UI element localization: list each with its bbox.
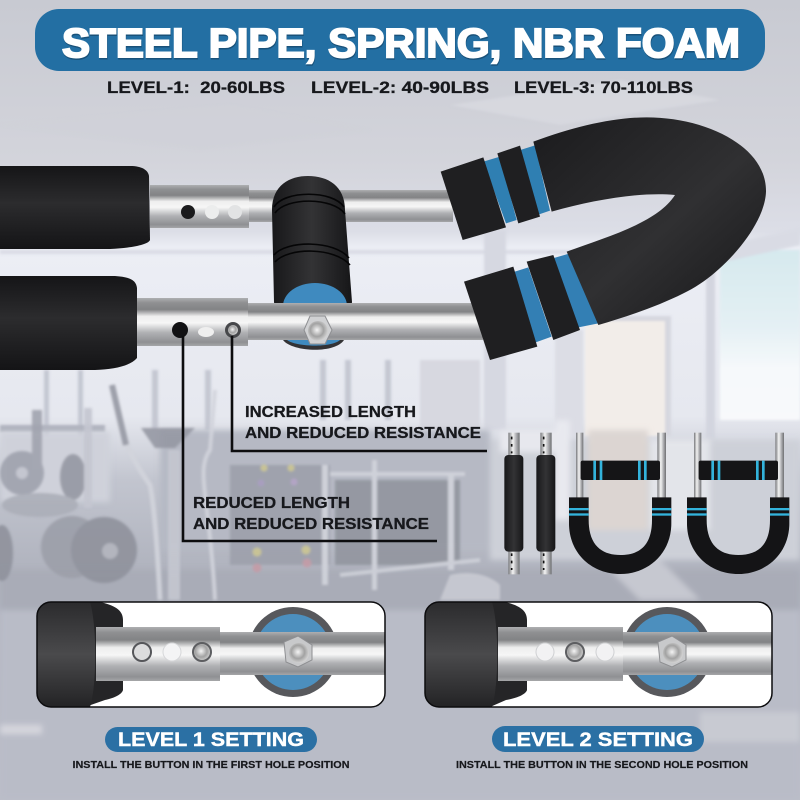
icon: assembled U handle right bbox=[687, 433, 789, 574]
resistance levels row bbox=[107, 78, 693, 97]
panel: level 1 close-up bbox=[37, 602, 385, 707]
background: weights and rack bbox=[0, 385, 500, 600]
icon: assembled U handle left bbox=[569, 433, 671, 574]
level 1 range: LEVEL-1: 20-60LBS bbox=[107, 78, 285, 97]
lower sleeve pipe bbox=[137, 298, 248, 346]
level 2 caption: INSTALL THE BUTTON IN THE SECOND HOLE POSITION bbox=[456, 759, 748, 771]
title banner: STEEL PIPE, SPRING, NBR FOAM bbox=[62, 20, 740, 66]
level 1 caption: INSTALL THE BUTTON IN THE FIRST HOLE POSITION bbox=[72, 759, 350, 771]
level 2 pill bbox=[492, 726, 704, 752]
product kit parts bbox=[504, 433, 789, 574]
lower inner pipe bbox=[248, 303, 483, 340]
cross roller bbox=[272, 176, 352, 350]
icon: two extension tubes bbox=[504, 433, 555, 574]
level 3 range: LEVEL-3: 70-110LBS bbox=[514, 78, 693, 97]
level 2 pill: LEVEL 2 SETTING bbox=[503, 730, 693, 751]
callout: reduced length: AND REDUCED RESISTANCE bbox=[193, 516, 429, 533]
level 2 range: LEVEL-2: 40-90LBS bbox=[311, 78, 489, 97]
panel: level 2 close-up bbox=[425, 602, 772, 707]
upper sleeve pipe bbox=[150, 185, 249, 228]
callout: reduced length: REDUCED LENGTH bbox=[193, 495, 350, 512]
callout: increased length: INCREASED LENGTH bbox=[245, 404, 416, 421]
level 1 pill: LEVEL 1 SETTING bbox=[118, 730, 304, 751]
upper pipe holes bbox=[181, 205, 242, 219]
upper foam grip bbox=[0, 166, 150, 249]
title banner bbox=[35, 9, 765, 71]
callout: increased length bbox=[232, 336, 487, 451]
callout: increased length: AND REDUCED RESISTANCE bbox=[245, 425, 481, 442]
main product: handle close-up bbox=[0, 117, 766, 370]
U-shaped foam handle bbox=[441, 117, 766, 360]
callout: reduced length bbox=[183, 336, 437, 541]
upper inner pipe bbox=[248, 190, 453, 222]
title banner: STEEL PIPE, SPRING, NBR FOAM bbox=[62, 22, 741, 68]
lower foam grip bbox=[0, 276, 137, 370]
hex bolt bbox=[304, 316, 332, 344]
lower pipe holes bbox=[172, 322, 241, 338]
level 1 pill bbox=[105, 727, 317, 752]
